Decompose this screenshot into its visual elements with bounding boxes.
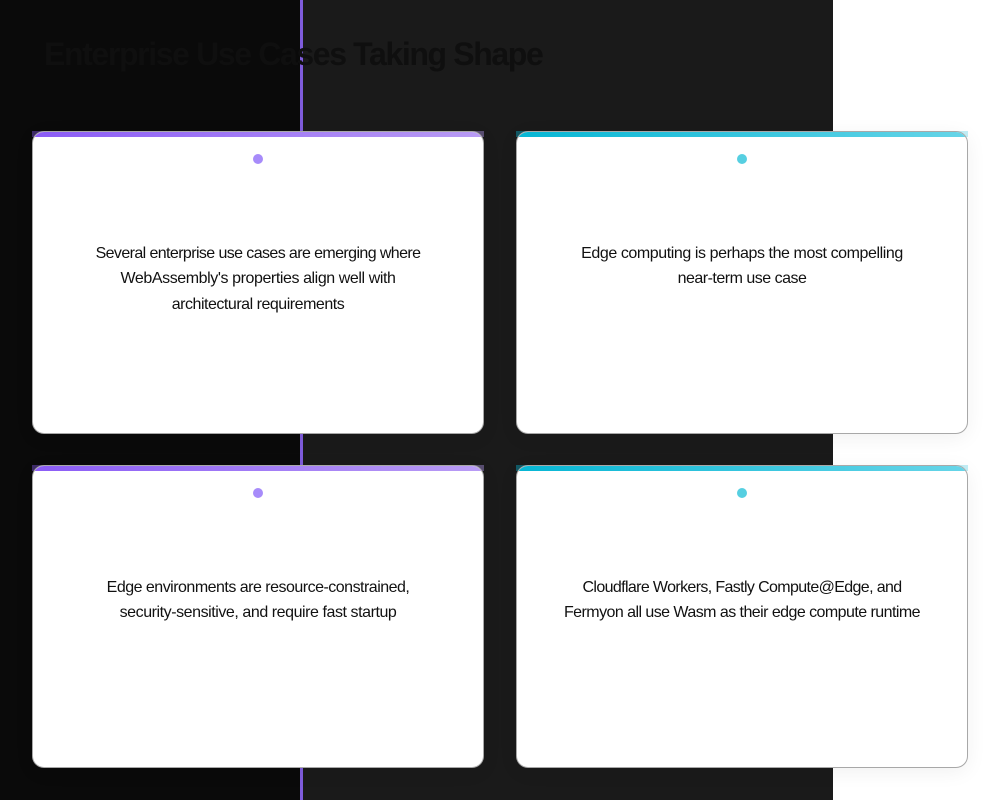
background: black left panel	[0, 0, 300, 800]
text: edge runtimes	[564, 579, 920, 621]
text: edge computing: near-term use case	[678, 270, 806, 287]
vertical accent line	[300, 0, 303, 800]
text: enterprise use cases	[96, 245, 420, 313]
text: enterprise use cases: Several enterprise use cases are emerging where	[96, 245, 420, 262]
panel: enterprise use cases	[32, 131, 484, 434]
panel: edge environments	[32, 465, 484, 768]
text: edge environments: Edge environments are resource-constrained,	[107, 579, 409, 596]
icon: cyan dot	[737, 488, 747, 498]
text: edge environments: security-sensitive, and require fast startup	[120, 604, 396, 621]
text: edge runtimes: Fermyon all use Wasm as their edge compute runtime	[564, 604, 920, 621]
panel: edge computing	[516, 131, 968, 436]
icon: purple dot	[253, 154, 263, 164]
text: edge environments	[107, 579, 409, 621]
text: edge computing: Edge computing is perhaps the most compelling	[581, 245, 903, 262]
icon: cyan dot	[737, 154, 747, 164]
panel: edge runtimes	[516, 465, 968, 770]
title: Enterprise Use Cases Taking Shape	[44, 36, 542, 72]
text: edge runtimes: Cloudflare Workers, Fastly Compute@Edge, and	[582, 579, 902, 596]
background: dark right panel	[303, 0, 833, 800]
text: enterprise use cases: WebAssembly's properties align well with	[121, 270, 395, 287]
text: enterprise use cases: architectural requirements	[172, 296, 344, 313]
text: edge computing	[581, 245, 903, 287]
icon: purple dot	[253, 488, 263, 498]
